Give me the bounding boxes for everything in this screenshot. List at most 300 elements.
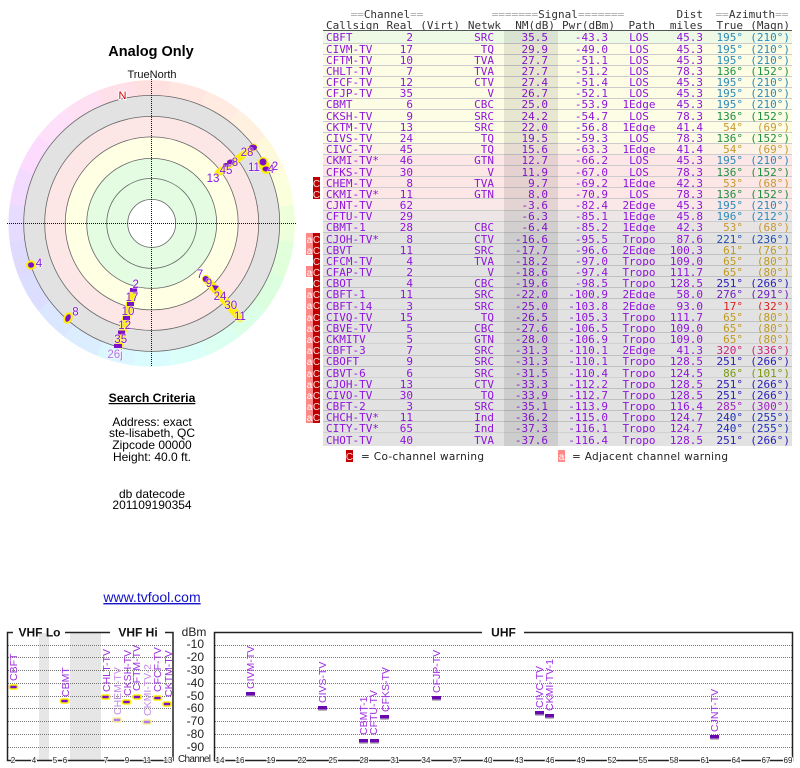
table rows: LOS — [629, 132, 649, 145]
table rows: Tropo — [622, 233, 656, 246]
table rows: 54° — [723, 121, 743, 134]
title: Analog Only: Analog Only — [108, 44, 194, 60]
table rows: 45.8 — [676, 210, 703, 223]
table rows: 78.3 — [676, 132, 703, 145]
polar chart — [0, 33, 342, 413]
station cluster: south — [107, 279, 139, 361]
VHF stations: CFCF-TV — [152, 647, 164, 692]
station cluster: southeast: 9 — [206, 278, 212, 290]
channel ticks — [11, 756, 793, 765]
table rows: V — [487, 87, 494, 100]
table rows: LOS — [629, 65, 649, 78]
table rows: CFAP-TV — [326, 266, 373, 279]
table rows: 124.7 — [670, 422, 703, 435]
table rows: 45 — [400, 143, 413, 156]
table rows: (255°) — [750, 422, 790, 435]
station cluster: southeast: 24 — [214, 291, 227, 303]
table rows: (80°) — [757, 311, 790, 324]
table rows: -31.3 — [515, 355, 548, 368]
co and adjacent channel flags: a — [307, 235, 313, 246]
table rows: 78.3 — [676, 188, 703, 201]
table rows: 100.3 — [670, 244, 703, 257]
table rows: 136° — [716, 188, 743, 201]
station cluster: northeast — [207, 144, 278, 185]
table rows: Tropo — [622, 311, 656, 324]
table rows: CIVC-TV — [326, 143, 373, 156]
table rows: -67.0 — [575, 166, 608, 179]
co and adjacent channel flags: C — [313, 346, 320, 357]
table rows: -53.9 — [575, 98, 608, 111]
table rows: -51.2 — [575, 65, 608, 78]
table rows: CIVQ-TV — [326, 311, 373, 324]
table rows: -31.5 — [515, 367, 548, 380]
table rows: 58.0 — [676, 288, 703, 301]
table rows: 285° — [716, 400, 743, 413]
table rows: -51.1 — [575, 54, 608, 67]
table rows: CITY-TV* — [326, 422, 379, 435]
table rows: 6 — [406, 367, 413, 380]
table rows: (212°) — [750, 210, 790, 223]
db datecode: 201109190354 — [112, 498, 192, 512]
table header: Callsign — [326, 19, 379, 32]
channel ticks: 2 — [11, 756, 16, 765]
dBm axis: -50 — [187, 689, 204, 703]
table rows: CIVO-TV — [326, 389, 373, 402]
table rows: LOS — [629, 87, 649, 100]
co and adjacent channel flags: a — [307, 391, 313, 402]
co and adjacent channel flags: C — [313, 391, 320, 402]
table rows: CBOFT — [326, 355, 359, 368]
channel ticks: 64 — [732, 756, 741, 765]
table rows: SRC — [474, 400, 494, 413]
table rows: 65° — [723, 266, 743, 279]
table rows: 111.7 — [670, 266, 703, 279]
table rows: 45.3 — [676, 154, 703, 167]
table rows: TVA — [474, 54, 494, 67]
table rows: -103.8 — [568, 300, 608, 313]
table rows: 2Edge — [622, 300, 656, 313]
table rows: (69°) — [757, 121, 790, 134]
table rows: 1Edge — [622, 143, 656, 156]
UHF stations: CIVM-TV — [245, 646, 257, 689]
table rows: -49.0 — [575, 43, 608, 56]
table rows: 320° — [716, 344, 743, 357]
table rows: 12 — [400, 76, 413, 89]
co and adjacent channel flags: C — [313, 279, 320, 290]
table rows: 35 — [400, 87, 413, 100]
channel ticks: 52 — [608, 756, 617, 765]
table rows: Tropo — [622, 422, 656, 435]
table rows: SRC — [474, 31, 494, 44]
co and adjacent channel flags: a — [307, 301, 313, 312]
table rows: CJNT-TV — [326, 199, 373, 212]
criteria text — [109, 415, 195, 464]
table rows: (266°) — [750, 378, 790, 391]
VHF stations: CHEM-TV — [112, 667, 124, 715]
table rows: Tropo — [622, 322, 656, 335]
table rows: -51.4 — [575, 76, 608, 89]
table rows: 2Edge — [622, 199, 656, 212]
channel ticks: 22 — [298, 756, 307, 765]
co and adjacent channel flags: a — [307, 413, 313, 424]
VHF stations — [8, 645, 175, 724]
table rows: -3.6 — [522, 199, 548, 212]
table rows: V — [487, 166, 494, 179]
table rows: 109.0 — [670, 333, 703, 346]
table rows: 128.5 — [670, 378, 703, 391]
table rows: SRC — [474, 344, 494, 357]
table rows: (266°) — [750, 434, 790, 447]
grid lines — [8, 646, 792, 748]
station cluster: south: 17 — [126, 292, 138, 304]
table rows: (152°) — [750, 65, 790, 78]
co and adjacent channel flags: C — [313, 301, 320, 312]
table rows: 8 — [406, 177, 413, 190]
table rows: Ind — [474, 411, 494, 424]
VHF frame: VHF Hi — [118, 626, 158, 640]
table header: NM(dB) — [515, 19, 555, 32]
table rows: 35.5 — [522, 31, 548, 44]
table rows: 78.3 — [676, 65, 703, 78]
table rows: 62 — [400, 199, 413, 212]
table rows: CBVE-TV — [326, 322, 373, 335]
co and adjacent channel flags: C — [313, 380, 320, 391]
co and adjacent channel flags: a — [307, 369, 313, 380]
VHF stations: CKSH-TV — [122, 650, 134, 696]
table rows: 11 — [400, 411, 413, 424]
table rows: (80°) — [757, 322, 790, 335]
station cluster: northeast: 45 — [220, 165, 232, 177]
table rows: TQ — [481, 132, 494, 145]
table rows: 251° — [716, 434, 743, 447]
table rows: -37.6 — [515, 434, 548, 447]
table rows: CFTM-TV — [326, 54, 373, 67]
db datecode: db datecode — [119, 487, 185, 501]
table rows: (291°) — [750, 288, 790, 301]
co and adjacent channel flags — [306, 179, 320, 424]
table rows: TQ — [481, 311, 494, 324]
table rows: (152°) — [750, 132, 790, 145]
table rows: 17 — [400, 43, 413, 56]
co and adjacent channel flags: C — [313, 257, 320, 268]
table rows: TQ — [481, 389, 494, 402]
table rows: CBVT-6 — [326, 367, 366, 380]
VHF frame — [8, 626, 173, 760]
table rows: 15.6 — [522, 143, 548, 156]
table rows: CKMI-TV* — [326, 188, 379, 201]
table rows: 195° — [716, 43, 743, 56]
table rows: -106.9 — [568, 333, 608, 346]
link: www.tvfool.com: www.tvfool.com — [102, 589, 201, 605]
table rows: -110.1 — [568, 355, 608, 368]
table rows: CIVS-TV — [326, 132, 373, 145]
co and adjacent channel flags: C — [313, 413, 320, 424]
table rows: 195° — [716, 87, 743, 100]
table rows: 45.3 — [676, 199, 703, 212]
table rows: -54.7 — [575, 110, 608, 123]
table rows: 27.4 — [522, 76, 548, 89]
table rows: -17.7 — [515, 244, 548, 257]
table rows: Tropo — [622, 411, 656, 424]
table rows: 136° — [716, 166, 743, 179]
UHF stations — [245, 646, 721, 744]
table rows: -27.6 — [515, 322, 548, 335]
table rows: 136° — [716, 132, 743, 145]
table rows: 11 — [400, 188, 413, 201]
station cluster: northeast: 2 — [272, 161, 278, 173]
table rows: 109.0 — [670, 255, 703, 268]
table rows: Tropo — [622, 434, 656, 447]
table rows: (266°) — [750, 355, 790, 368]
table rows: 30 — [400, 166, 413, 179]
table rows: CFJP-TV — [326, 87, 373, 100]
table rows: TVA — [474, 255, 494, 268]
table rows: 221° — [716, 233, 743, 246]
legend: adjacent channel warning: a — [559, 452, 565, 463]
warning flags — [306, 177, 320, 424]
station cluster: south: 10 — [122, 306, 134, 318]
table rows: Tropo — [622, 389, 656, 402]
channel ticks: 6 — [63, 756, 68, 765]
table rows: 41.3 — [676, 344, 703, 357]
co and adjacent channel flags: a — [307, 357, 313, 368]
table rows: TQ — [481, 143, 494, 156]
UHF stations: CFKS-TV — [380, 667, 392, 712]
table rows: 1Edge — [622, 221, 656, 234]
table rows: CFKS-TV — [326, 166, 373, 179]
table rows: (210°) — [750, 154, 790, 167]
UHF stations: CFTU-TV — [368, 690, 380, 735]
table rows: CKMITV — [326, 333, 366, 346]
table rows: GTN — [474, 154, 494, 167]
table rows: 136° — [716, 110, 743, 123]
table rows: 1Edge — [622, 210, 656, 223]
dBm axis: -60 — [187, 701, 204, 715]
table header: (Magn) — [750, 19, 790, 32]
station table — [323, 8, 792, 447]
co and adjacent channel flags: a — [307, 268, 313, 279]
table rows: 116.4 — [670, 400, 703, 413]
VHF stations: CKTM-TV — [163, 650, 175, 697]
table rows: 7 — [406, 344, 413, 357]
table rows: 3 — [406, 400, 413, 413]
table rows: Ind — [474, 422, 494, 435]
table rows: 136° — [716, 65, 743, 78]
table rows: (210°) — [750, 87, 790, 100]
table rows: (266°) — [750, 389, 790, 402]
table rows: 195° — [716, 154, 743, 167]
co and adjacent channel flags: a — [307, 313, 313, 324]
table rows: 53° — [723, 177, 743, 190]
VHF stations: CKMI-TV-2 — [142, 664, 154, 716]
table rows: 2Edge — [622, 344, 656, 357]
table rows: CFCF-TV — [326, 76, 373, 89]
dBm axis: -30 — [187, 663, 204, 677]
channel ticks: 55 — [639, 756, 648, 765]
table rows: -18.6 — [515, 266, 548, 279]
channel ticks: 49 — [577, 756, 586, 765]
dBm axis: dBm — [182, 625, 206, 639]
table rows: -106.5 — [568, 322, 608, 335]
criteria text: ste-lisabeth, QC — [109, 426, 195, 440]
co and adjacent channel flags: a — [307, 402, 313, 413]
table rows: CBC — [474, 221, 494, 234]
criteria text: Zipcode 00000 — [112, 438, 192, 452]
channel ticks: 31 — [391, 756, 400, 765]
table rows: -116.1 — [568, 422, 608, 435]
UHF stations: CKMI-TV-1 — [544, 659, 556, 711]
table rows: 11.9 — [522, 166, 548, 179]
table header: Path — [628, 19, 655, 32]
channel ticks: 69 — [784, 756, 793, 765]
table rows: 1Edge — [622, 177, 656, 190]
table rows: 111.7 — [670, 311, 703, 324]
co-channel flags — [313, 177, 320, 199]
table header: Netwk — [468, 19, 501, 32]
table rows: 27.7 — [522, 54, 548, 67]
table rows: 30 — [400, 389, 413, 402]
table rows: CIVM-TV — [326, 43, 373, 56]
table rows: 8.0 — [528, 188, 548, 201]
table header: True — [716, 19, 743, 32]
legend: adjacent channel warning: = Adjacent channel warning — [572, 451, 728, 463]
UHF stations: CFJP-TV — [431, 650, 443, 693]
UHF stations: CJNT-TV — [709, 689, 721, 732]
dBm axis — [178, 625, 211, 765]
table rows: CHLT-TV — [326, 65, 373, 78]
outer hue wheel — [0, 33, 342, 413]
table rows: -33.3 — [515, 378, 548, 391]
table rows: -69.2 — [575, 177, 608, 190]
table rows: -112.7 — [568, 389, 608, 402]
table rows: -98.5 — [575, 277, 608, 290]
table rows: Tropo — [622, 266, 656, 279]
table rows: -85.2 — [575, 221, 608, 234]
table rows: CBFT-1 — [326, 288, 366, 301]
table rows: 65° — [723, 333, 743, 346]
table rows: 53° — [723, 221, 743, 234]
table rows: 78.3 — [676, 166, 703, 179]
table rows: -63.3 — [575, 143, 608, 156]
co and adjacent channel flags: a — [307, 290, 313, 301]
table rows: (210°) — [750, 31, 790, 44]
table rows: 128.5 — [670, 355, 703, 368]
table rows: 9 — [406, 110, 413, 123]
table rows: Tropo — [622, 367, 656, 380]
table rows: (210°) — [750, 54, 790, 67]
table rows: -25.0 — [515, 300, 548, 313]
table rows: 45.3 — [676, 54, 703, 67]
table header: ==Channel== — [351, 8, 424, 21]
table rows: 251° — [716, 355, 743, 368]
table rows: 41.4 — [676, 143, 703, 156]
co and adjacent channel flags: a — [307, 246, 313, 257]
table rows: -105.3 — [568, 311, 608, 324]
table rows: 5 — [406, 322, 413, 335]
table rows: 2Edge — [622, 288, 656, 301]
channel ticks: 11 — [143, 756, 152, 765]
dBm axis: -90 — [187, 740, 204, 754]
table rows: CJOH-TV — [326, 378, 373, 391]
table rows: GTN — [474, 333, 494, 346]
channel ticks: 67 — [762, 756, 771, 765]
station cluster: southeast: 11 — [234, 311, 246, 323]
table rows: 28 — [400, 221, 413, 234]
table rows: CKMI-TV* — [326, 154, 379, 167]
co and adjacent channel flags: C — [313, 190, 320, 201]
table rows: 45.3 — [676, 98, 703, 111]
table rows: -33.9 — [515, 389, 548, 402]
table rows: -95.5 — [575, 233, 608, 246]
table rows: 10 — [400, 54, 413, 67]
legend: co-channel warning: C — [346, 452, 353, 463]
table rows: (76°) — [757, 244, 790, 257]
table rows: -100.9 — [568, 288, 608, 301]
station cluster: southeast: 7 — [197, 269, 203, 281]
station: channel 8 southwest — [63, 306, 79, 324]
table rows: 29 — [400, 210, 413, 223]
table rows: CTV — [474, 76, 494, 89]
range rings — [24, 95, 280, 351]
label: TrueNorth: TrueNorth — [127, 69, 177, 81]
table rows: (68°) — [757, 177, 790, 190]
co and adjacent channel flags: a — [307, 335, 313, 346]
dBm axis: -20 — [187, 650, 204, 664]
table rows — [323, 31, 792, 447]
table rows: 87.6 — [676, 233, 703, 246]
table header: =======Signal======= — [492, 8, 625, 21]
co and adjacent channel flags: C — [313, 324, 320, 335]
table rows: CBMT — [326, 98, 353, 111]
table rows: 11 — [400, 288, 413, 301]
signal bands — [24, 95, 280, 351]
table rows: 42.3 — [676, 221, 703, 234]
table rows: (336°) — [750, 344, 790, 357]
table rows: 45.3 — [676, 87, 703, 100]
table rows: -31.3 — [515, 344, 548, 357]
table rows: 240° — [716, 422, 743, 435]
table rows: 54° — [723, 143, 743, 156]
table rows: Tropo — [622, 333, 656, 346]
dBm axis: -40 — [187, 676, 204, 690]
table rows: 45.3 — [676, 76, 703, 89]
table header — [323, 8, 792, 32]
table rows: 4 — [406, 255, 413, 268]
table rows: 13 — [400, 378, 413, 391]
channel ticks: 28 — [360, 756, 369, 765]
station cluster: northeast: 13 — [207, 173, 219, 185]
table rows: CTV — [474, 233, 494, 246]
table rows: (80°) — [757, 266, 790, 279]
label: magnetic north: N — [119, 90, 127, 102]
table rows: CBC — [474, 277, 494, 290]
table rows: (236°) — [750, 233, 790, 246]
table rows: LOS — [629, 110, 649, 123]
table rows: 41.4 — [676, 121, 703, 134]
table rows: -6.4 — [522, 221, 548, 234]
table rows: -52.1 — [575, 87, 608, 100]
UHF stations: CBMT-1 — [358, 696, 370, 735]
table rows: 93.0 — [676, 300, 703, 313]
table rows: 65° — [723, 311, 743, 324]
VHF stations: CBFT — [8, 653, 20, 681]
table rows: -37.3 — [515, 422, 548, 435]
table rows: 25.0 — [522, 98, 548, 111]
table rows: 65° — [723, 322, 743, 335]
table rows: LOS — [629, 43, 649, 56]
channel ticks: 34 — [422, 756, 431, 765]
table rows: 195° — [716, 31, 743, 44]
